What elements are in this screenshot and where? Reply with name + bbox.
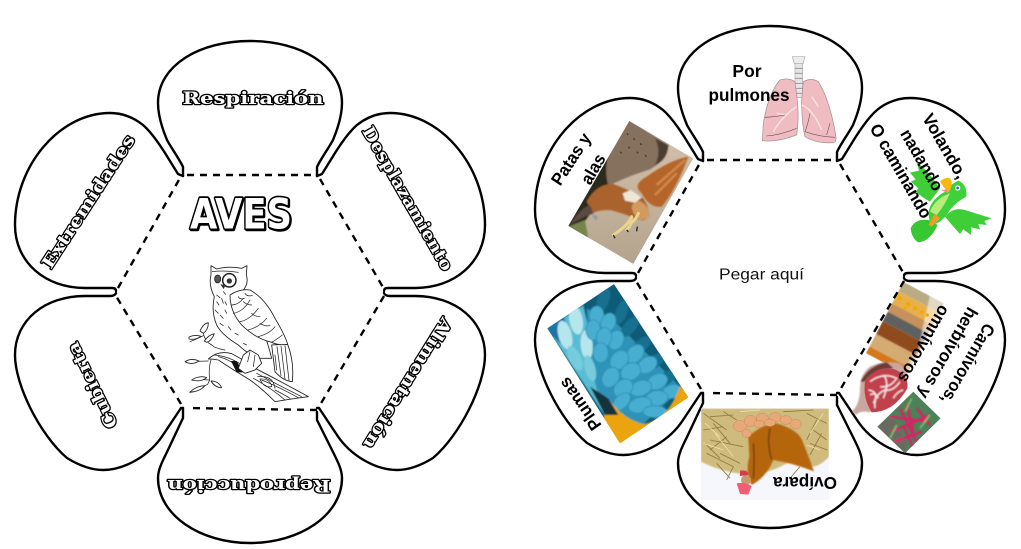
photo: raw meat <box>852 362 908 415</box>
illustration: green parrot <box>910 163 992 242</box>
petal: covering <box>15 293 183 470</box>
petal: respiration <box>158 41 342 176</box>
text: Por pulmones <box>708 61 790 105</box>
photo: hen on eggs <box>701 408 829 500</box>
text: Patas y alas: alas <box>576 150 610 188</box>
petals and fold lines <box>535 26 1005 528</box>
text: Carnívoros, herbívoros y omnívoros: herbívoros y <box>914 304 982 402</box>
photo: grains and seeds <box>866 282 944 374</box>
hexagon fold lines <box>116 175 384 410</box>
text: Pegar aquí: Pegar aquí <box>719 266 805 284</box>
photo: red leafy greens <box>877 392 941 453</box>
label: Extremidades: Extremidades <box>38 132 140 272</box>
petal: reproduction <box>158 408 342 543</box>
text: Volando, nadando O caminando: nadando <box>896 126 948 194</box>
panel: blank bird template flower <box>15 41 485 543</box>
text: Volando, nadando O caminando: O caminando <box>866 120 936 222</box>
text: Ovípara: Ovípara <box>773 473 837 493</box>
text: Carnívoros, herbívoros y omnívoros: omnívoros <box>894 302 954 386</box>
text: Por pulmones: pulmones <box>708 85 790 105</box>
photo: hawk in flight <box>567 118 693 264</box>
label: Desplazamiento: Desplazamiento <box>358 123 456 275</box>
label: Cubierta: Cubierta <box>64 339 122 431</box>
photo: blue feathers <box>545 284 693 447</box>
text: Volando, nadando O caminando <box>866 110 972 222</box>
fold lines <box>636 160 904 395</box>
icon: owl on a branch <box>185 266 308 402</box>
panel: completed bird flower <box>535 26 1005 528</box>
heading: AVES: AVES <box>190 190 292 238</box>
text: Patas y alas: Patas y <box>547 129 595 189</box>
label: Reproducción: Reproducción <box>168 475 330 495</box>
petal: displacement <box>317 113 485 291</box>
text: Por pulmones: Por <box>732 61 762 81</box>
petal: feeding <box>317 293 485 470</box>
illustration: lungs <box>762 57 836 143</box>
petal: extremities <box>15 113 183 291</box>
text: Carnívoros, herbívoros y omnívoros: Carnívoros, <box>937 320 999 408</box>
text: Volando, nadando O caminando: Volando, <box>918 110 972 182</box>
label: Respiración: Respiración <box>182 89 324 109</box>
label: Alimentación: Alimentación <box>359 313 456 452</box>
text: Plumas: Plumas <box>554 373 605 434</box>
text: Carnívoros, herbívoros y omnívoros <box>894 302 999 408</box>
